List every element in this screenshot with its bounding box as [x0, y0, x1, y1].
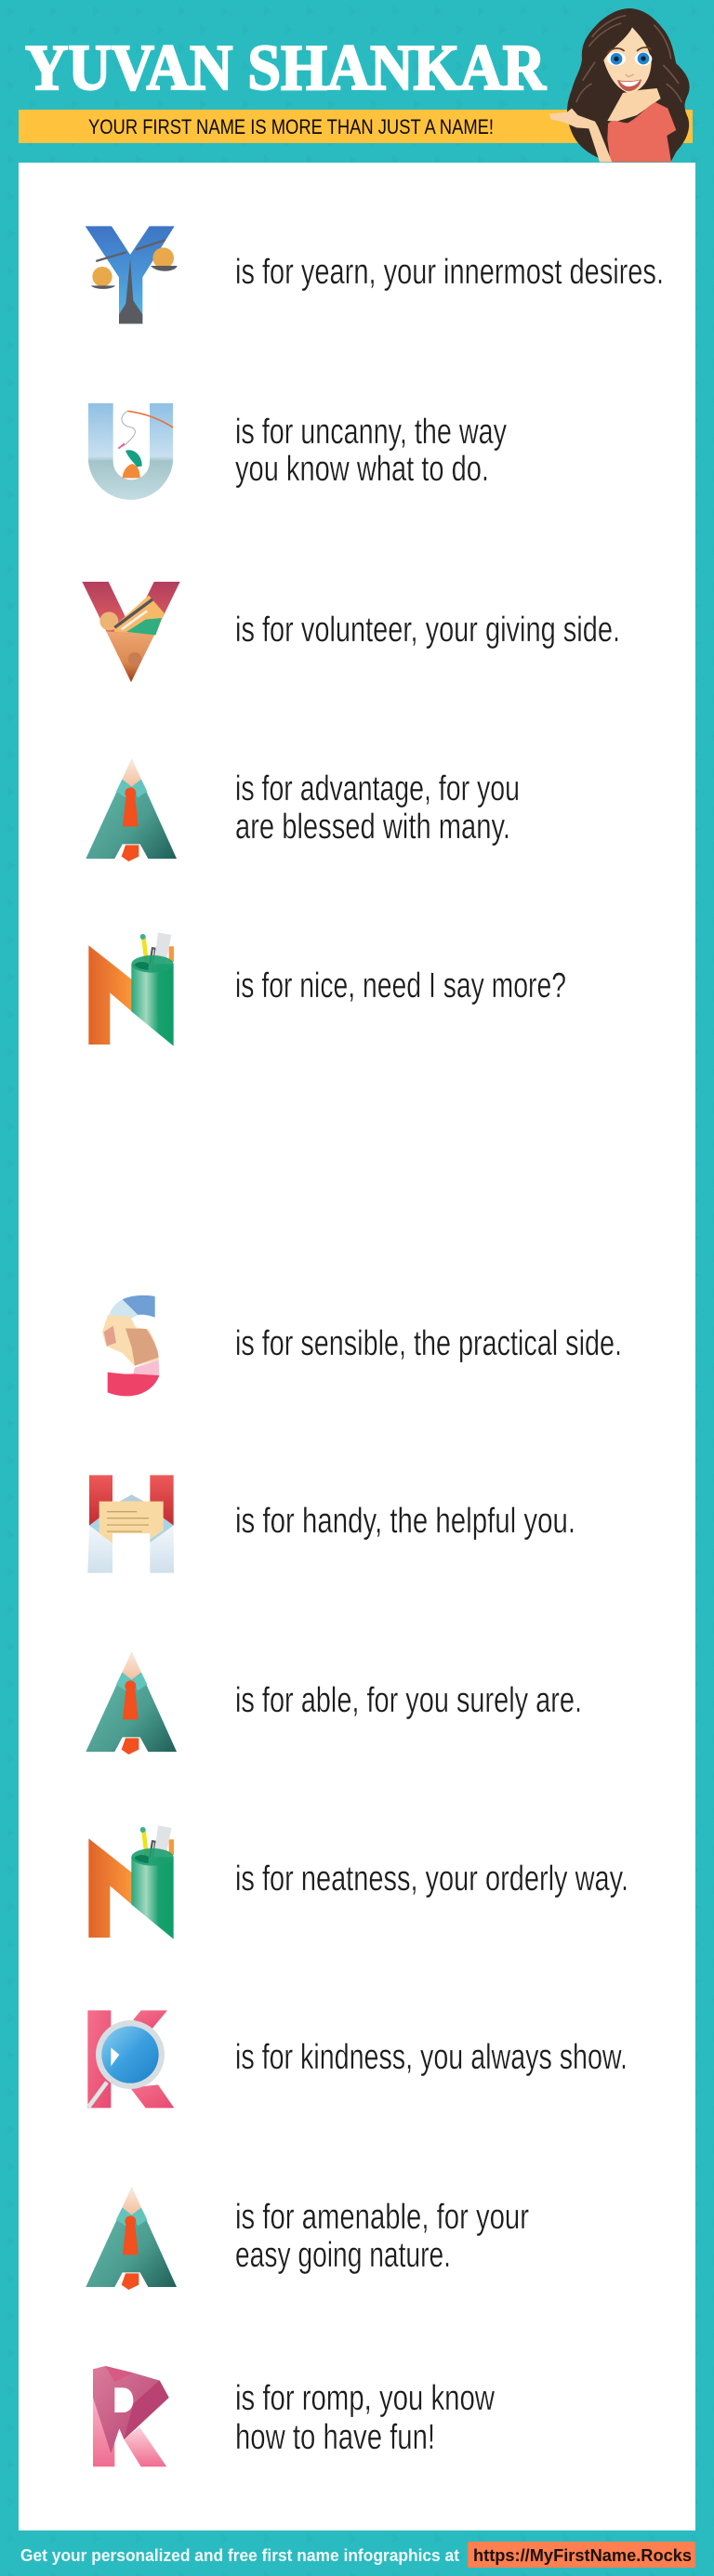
icon: letter U with fishing rod — [88, 403, 173, 500]
row: R: how to have fun! — [235, 2418, 435, 2457]
subtitle banner — [19, 110, 693, 143]
icon: letter N with pencil cup — [88, 932, 174, 1046]
icon: letter K with magnifying glass — [87, 2010, 174, 2108]
row: V — [82, 582, 620, 682]
row: A amenable: easy going nature. — [235, 2236, 451, 2275]
row: R — [93, 2366, 495, 2466]
text: nice: is for nice, need I say more? — [235, 966, 566, 1005]
row: H — [87, 1475, 575, 1573]
row: S — [102, 1295, 622, 1396]
text: uncanny: is for uncanny, the way — [235, 413, 507, 452]
icon: letter N with pencil cup — [88, 1825, 174, 1939]
subtitle banner: YOUR FIRST NAME IS MORE THAN JUST A NAME! — [88, 115, 494, 138]
icon: letter Y with scales — [86, 226, 178, 323]
text: amenable: is for amenable, for your — [235, 2198, 529, 2237]
icon: letter A with tie — [86, 1652, 177, 1755]
row: Y — [86, 226, 664, 323]
icon: letter S with hands — [102, 1295, 159, 1396]
text: able: is for able, for you surely are. — [235, 1681, 582, 1720]
icon: letter R with gem — [93, 2366, 169, 2466]
row: K — [87, 2010, 628, 2108]
icon: letter V with wallet — [82, 582, 180, 682]
row: A advantage: are blessed with many. — [235, 808, 510, 847]
row: A amenable — [86, 2188, 529, 2290]
row: U — [88, 403, 507, 500]
text: advantage: is for advantage, for you — [235, 769, 520, 808]
footer url badge — [468, 2542, 695, 2568]
icon: letter A with tie — [86, 2188, 177, 2290]
text: romp: is for romp, you know — [235, 2379, 495, 2418]
footer text: Get your personalized and free first name infographics at — [20, 2546, 459, 2565]
row: A able — [86, 1652, 582, 1755]
text: handy: is for handy, the helpful you. — [235, 1502, 575, 1541]
row: N neatness — [88, 1825, 628, 1939]
row: U: you know what to do. — [235, 450, 489, 489]
icon: letter A with tie — [86, 759, 177, 861]
character illustration — [549, 8, 690, 162]
row: N nice — [88, 932, 566, 1046]
icon: letter H with envelope — [87, 1475, 174, 1573]
footer url badge: https://MyFirstName.Rocks — [473, 2546, 692, 2565]
row: A advantage — [86, 759, 520, 861]
header title: YUVAN SHANKAR — [25, 33, 547, 104]
